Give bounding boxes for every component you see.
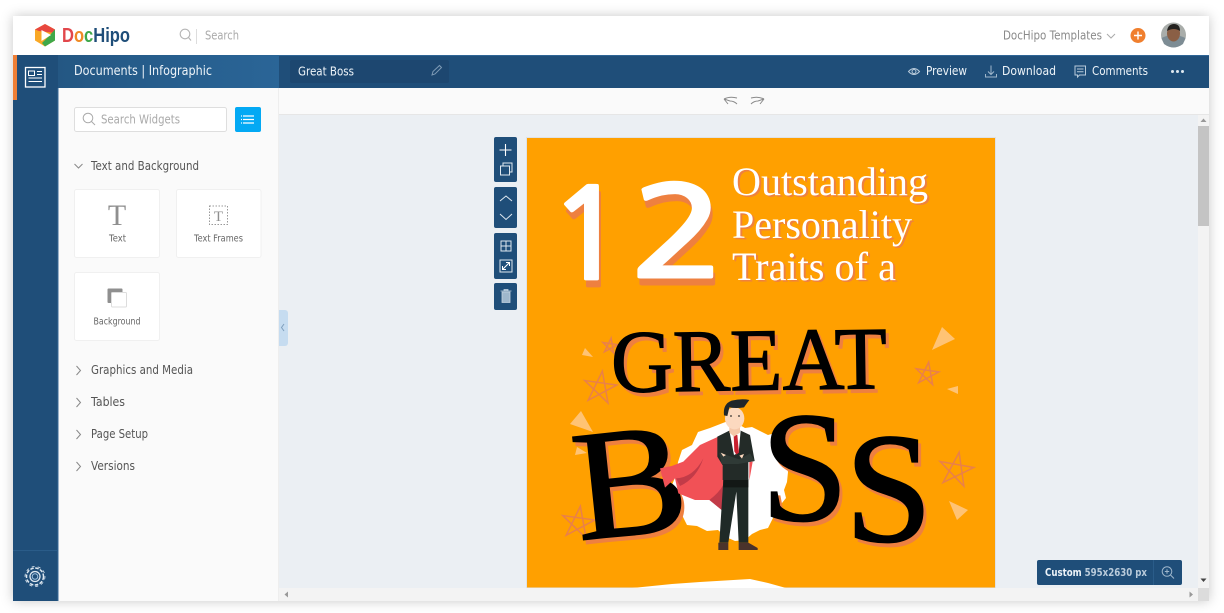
word GREAT: GREAT bbox=[610, 310, 888, 412]
left icon rail bbox=[13, 55, 58, 601]
word BOSS: S bbox=[764, 384, 851, 558]
section: graphics and media: Graphics and Media bbox=[91, 362, 193, 377]
word GREAT: GREAT bbox=[613, 314, 891, 416]
comments action bbox=[1075, 63, 1148, 78]
number 12: 2 bbox=[628, 171, 728, 297]
comments action: Comments bbox=[1092, 63, 1148, 78]
logo wordmark: DocHipo bbox=[62, 25, 130, 47]
icon: documents bbox=[26, 68, 45, 87]
number 12: 1 bbox=[548, 180, 633, 306]
head and hair bbox=[724, 399, 749, 437]
cape bbox=[660, 437, 753, 510]
title lines: Traits of a bbox=[732, 244, 896, 289]
number 12 bbox=[546, 171, 730, 306]
legs and shoes bbox=[718, 479, 758, 550]
download action bbox=[986, 63, 1056, 78]
collapse handle bbox=[279, 310, 288, 346]
jacket and tie bbox=[717, 431, 755, 480]
title lines: Traits of a bbox=[734, 246, 898, 290]
section heading: text and background: Text and Background bbox=[90, 158, 199, 173]
download action: Download bbox=[1002, 63, 1056, 78]
templates menu: DocHipo Templates bbox=[1003, 28, 1102, 42]
number 12: 2 bbox=[630, 178, 730, 304]
documents heading bar: Documents | Infographic bbox=[74, 64, 212, 79]
icon: search bbox=[180, 29, 191, 40]
section: tables bbox=[76, 394, 125, 409]
page size and zoom badge bbox=[1037, 560, 1182, 585]
word BOSS: B bbox=[567, 394, 698, 578]
section: versions bbox=[76, 458, 135, 473]
document title field: Great Boss bbox=[298, 64, 354, 78]
canvas tool: delete bbox=[494, 283, 517, 310]
word BOSS: S bbox=[845, 401, 932, 575]
canvas tool group: grid and resize bbox=[494, 233, 517, 279]
icon: add button bbox=[1130, 28, 1146, 43]
title lines: Personality bbox=[734, 204, 914, 248]
editor action bar bbox=[279, 55, 1209, 88]
word BOSS: S bbox=[761, 380, 848, 554]
widget card: background: Background bbox=[94, 316, 140, 328]
icon: DocHipo logo bbox=[35, 24, 55, 46]
word BOSS: B bbox=[564, 390, 695, 574]
illustration: boss with red cape bbox=[660, 399, 758, 550]
document title field bbox=[290, 60, 449, 83]
section: tables: Tables bbox=[90, 394, 125, 409]
preview action bbox=[908, 63, 967, 78]
canvas tool group: move up and down bbox=[494, 187, 517, 228]
undo redo toolbar bbox=[279, 88, 1209, 115]
decorative stars bbox=[560, 337, 976, 539]
next section torn edge bbox=[632, 579, 786, 588]
widget search box: Search Widgets bbox=[101, 112, 180, 126]
preview action: Preview bbox=[926, 63, 967, 78]
number 12: 1 bbox=[546, 173, 631, 299]
more menu bbox=[1171, 70, 1184, 73]
widget card: text frames: T bbox=[214, 209, 223, 225]
icon: settings gear bbox=[25, 566, 45, 586]
word BOSS: S bbox=[848, 405, 935, 579]
section: page setup bbox=[76, 426, 148, 441]
page size and zoom badge: Custom 595x2630 px bbox=[1045, 566, 1147, 579]
decorative triangles bbox=[570, 327, 968, 520]
canvas tool group: add and duplicate bbox=[494, 137, 517, 182]
icon: avatar bbox=[1161, 22, 1186, 48]
widget search box bbox=[74, 108, 226, 132]
widget card: text: Text bbox=[108, 234, 126, 244]
list view button bbox=[235, 107, 261, 132]
vertical scrollbar bbox=[1198, 115, 1209, 588]
title lines bbox=[732, 159, 930, 290]
title lines: Outstanding bbox=[734, 160, 930, 206]
documents heading bar bbox=[58, 55, 279, 88]
widget card: text frames: Text Frames bbox=[193, 234, 243, 244]
title lines: Outstanding bbox=[732, 159, 928, 204]
widget card: text bbox=[74, 190, 160, 258]
horizontal scrollbar bbox=[279, 588, 1209, 601]
widget panel bbox=[58, 88, 279, 601]
top header bar bbox=[13, 16, 1209, 55]
widget card: background bbox=[74, 272, 160, 340]
canvas workspace bbox=[279, 115, 1198, 588]
section: versions: Versions bbox=[91, 458, 135, 473]
word BOSS bbox=[564, 380, 935, 579]
section: page setup: Page Setup bbox=[91, 426, 148, 441]
torn paper blob bbox=[672, 418, 788, 541]
title lines: Personality bbox=[732, 202, 912, 247]
widget card: text: T bbox=[108, 199, 126, 232]
widget card: text frames bbox=[176, 190, 261, 258]
infographic page bbox=[526, 138, 996, 588]
search label: Search bbox=[205, 28, 239, 42]
